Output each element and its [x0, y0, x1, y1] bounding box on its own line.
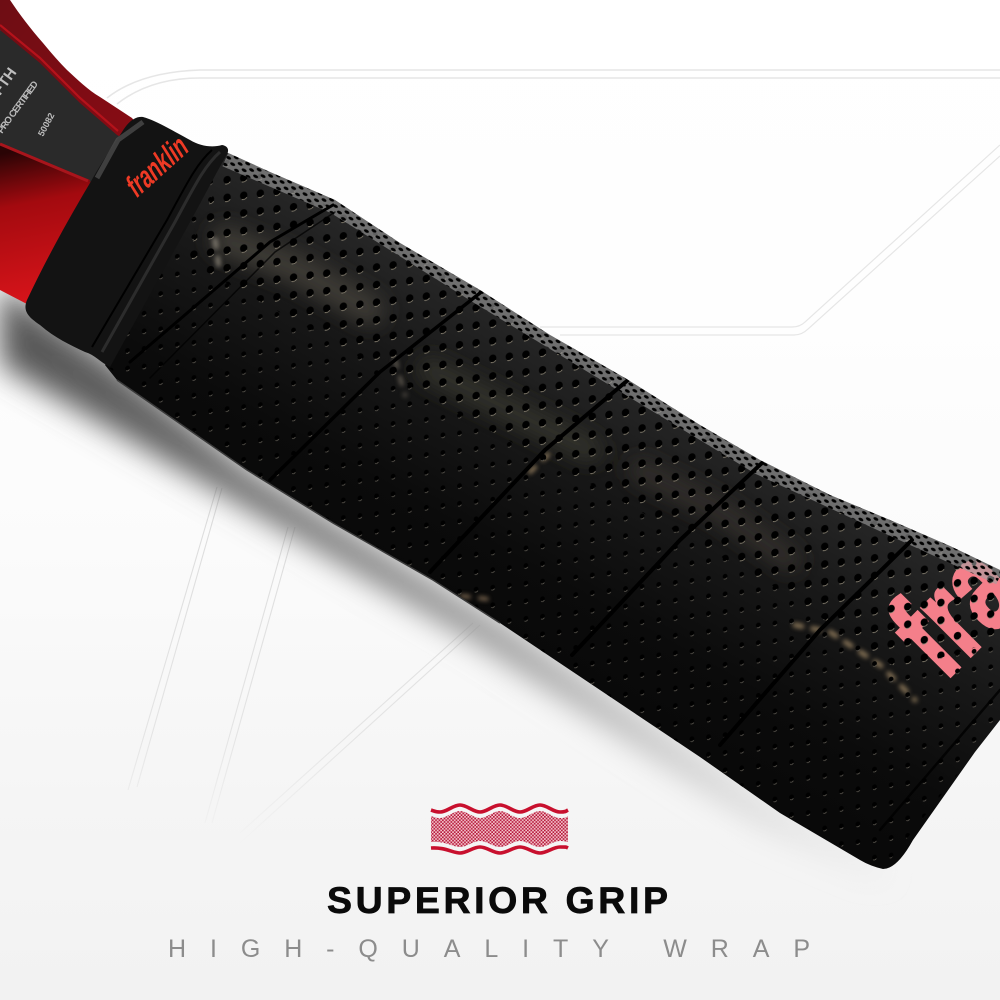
subheading: HIGH-QUALITY WRAP — [168, 935, 810, 963]
warm highlights — [215, 240, 915, 700]
top wave — [431, 805, 568, 812]
perforation small dots — [105, 152, 1000, 869]
collar texture highlight — [97, 122, 143, 178]
tape seams — [130, 205, 1000, 830]
heading: SUPERIOR GRIP — [327, 879, 668, 921]
collar ridge — [102, 152, 220, 352]
frame highlight — [0, 144, 88, 181]
racket print — [0, 65, 57, 138]
handle body — [105, 152, 1000, 869]
watermark: outline logo lines — [107, 70, 1000, 843]
silver top band — [226, 158, 1000, 576]
rubber collar — [25, 117, 228, 367]
red inner edge — [0, 25, 118, 131]
red outer frame — [0, 0, 150, 190]
collar logo: franklin: franklin — [121, 127, 193, 205]
icon: grip texture — [431, 805, 568, 853]
racket shaft — [0, 0, 150, 320]
perforation large dots — [185, 165, 1000, 670]
halftone band — [431, 811, 568, 847]
top band perforations — [226, 158, 1000, 576]
handle shadow — [0, 285, 880, 875]
collar body — [25, 117, 228, 367]
lower red frame — [0, 143, 90, 320]
grip handle — [105, 152, 1000, 869]
dark throat panel — [0, 30, 145, 183]
bottom wave — [431, 847, 568, 853]
soft sheen — [225, 240, 790, 560]
collar ridge shadow — [92, 150, 212, 347]
print: code: 50082 — [36, 111, 57, 138]
handle lower rim — [117, 380, 500, 623]
